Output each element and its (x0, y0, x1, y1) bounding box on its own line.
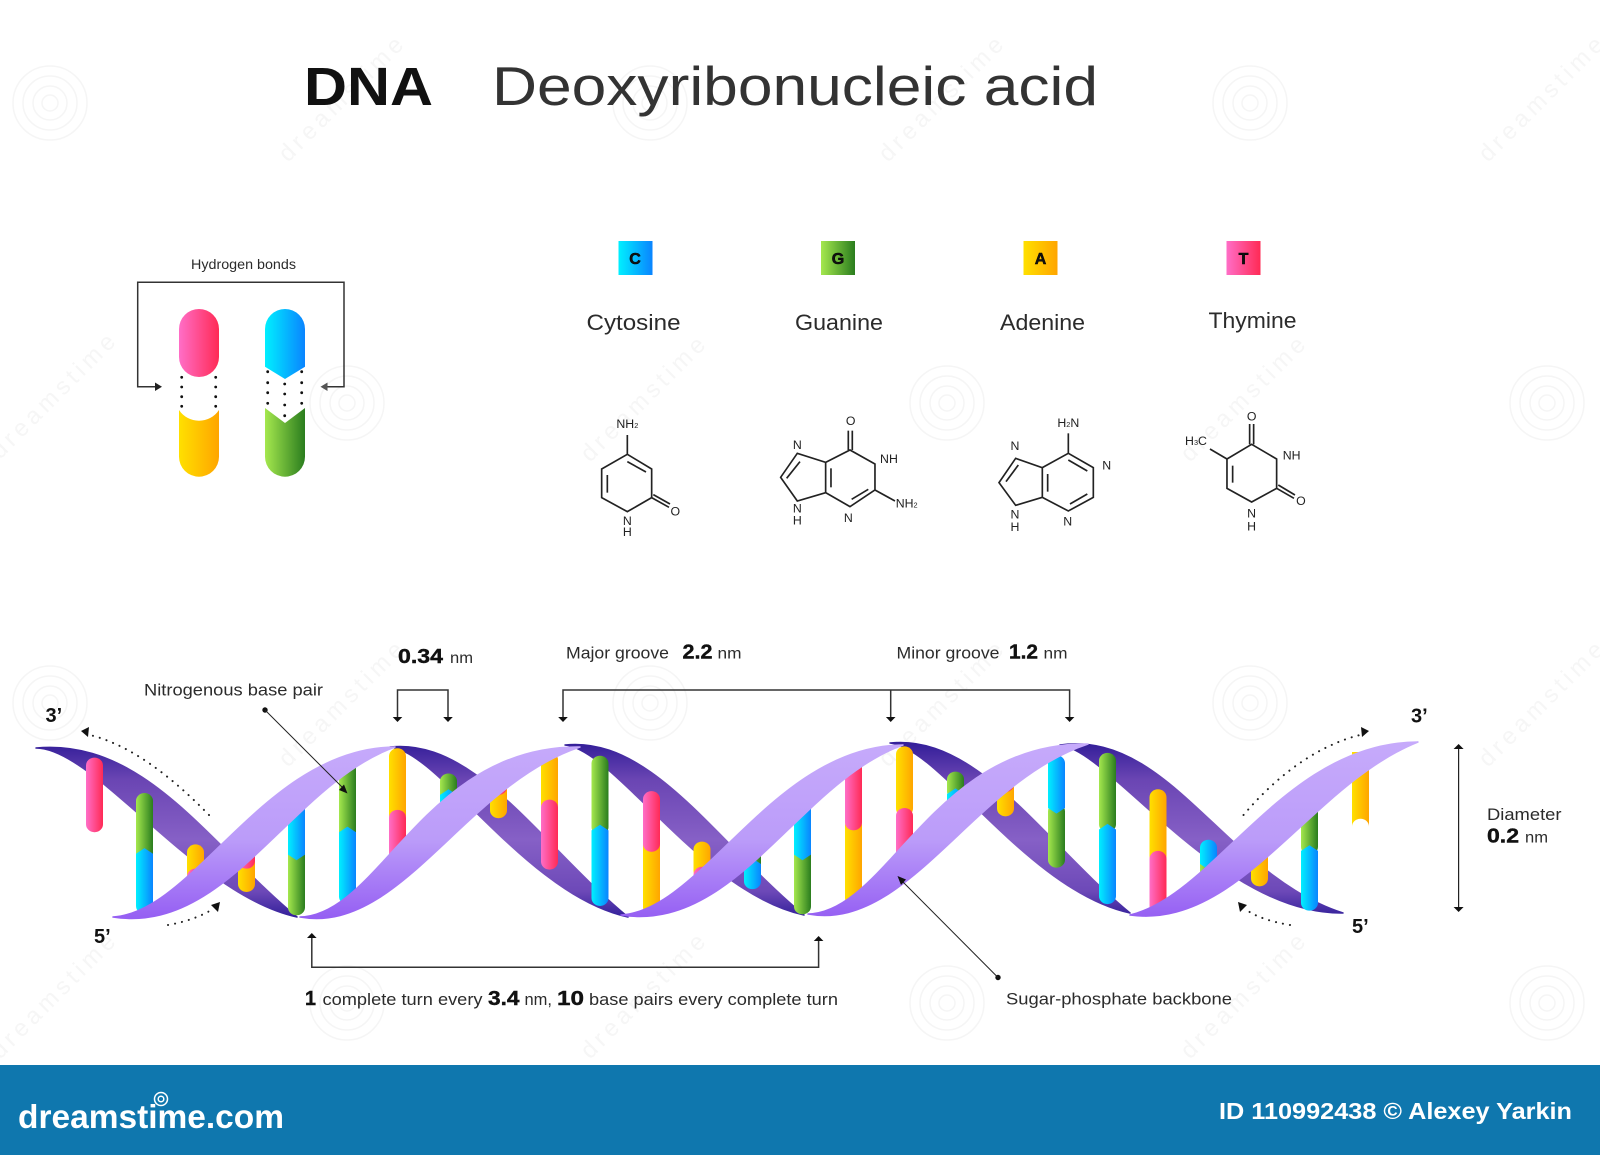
label: diameter: nm (1525, 830, 1548, 846)
name: Cytosine: Cytosine (586, 310, 680, 335)
label: complete turn: complete turn every (322, 990, 483, 1009)
footer bar (0, 1065, 1600, 1155)
badge A (1024, 241, 1058, 275)
label: diameter (1487, 805, 1562, 848)
label: sugar-phosphate backbone: Sugar-phosphate backbone (1006, 990, 1232, 1008)
label: 5 prime left: 5’ (94, 926, 111, 948)
watermark pattern: dreamstime (273, 31, 409, 167)
dotted arrow: lower right (1238, 902, 1290, 925)
label: minor groove: Minor groove (896, 644, 1000, 662)
watermark pattern: dreamstime (1175, 331, 1311, 467)
label: major groove: 2.2 (682, 642, 712, 664)
label: minor groove: 1.2 (1009, 642, 1038, 664)
capsule: cytosine (265, 309, 305, 379)
base pair bars (86, 746, 1369, 915)
structure: thymine: NH (1283, 448, 1301, 462)
capsule: guanine (265, 408, 305, 477)
structure: adenine: N (1063, 515, 1072, 529)
callout arrow: backbone (898, 876, 1001, 980)
structure: thymine: N (1247, 507, 1256, 521)
structure: guanine (781, 414, 918, 528)
label: complete turn: nm, (524, 990, 552, 1009)
label: major groove (566, 642, 742, 664)
structure: thymine: H (1247, 519, 1256, 533)
badge T (1226, 241, 1260, 275)
label: complete turn (305, 988, 838, 1010)
panel: adenine (999, 241, 1111, 534)
bracket with arrows (138, 282, 344, 391)
panel: hydrogen bonds (138, 257, 344, 477)
structure: cytosine: O (671, 504, 680, 518)
structure: thymine (1185, 409, 1306, 533)
structure: adenine: N (1011, 439, 1019, 453)
chart: DNA double helix (36, 742, 1418, 918)
structure: guanine: NH (880, 452, 898, 466)
label: 3 prime right: 3’ (1411, 706, 1428, 728)
label: complete turn: 10 (557, 988, 584, 1010)
label: 0.34 nm: 0.34 (398, 646, 444, 668)
title (304, 55, 1098, 117)
badge A: A (1035, 251, 1047, 268)
name: Thymine: Thymine (1208, 308, 1296, 333)
dotted arrow: lower left (168, 902, 220, 925)
structure: guanine: NH2 (896, 496, 918, 510)
structure: adenine: H (1011, 520, 1019, 534)
label: 3 prime left: 3’ (46, 705, 62, 727)
heading: hydrogen bonds: Hydrogen bonds (191, 257, 296, 272)
capsule: thymine (179, 309, 219, 377)
capsule: adenine (179, 410, 219, 477)
watermark pattern: dreamstime (873, 636, 1009, 772)
label: 0.34 nm (398, 646, 473, 668)
label: complete turn: 1 (305, 988, 316, 1010)
watermark pattern: dreamstime (1175, 928, 1311, 1064)
watermark pattern: dreamstime (575, 928, 711, 1064)
label: diameter: 0.2 (1487, 826, 1519, 848)
structure: thymine: H3C (1185, 434, 1207, 448)
title: Deoxyribonucleic acid (492, 55, 1098, 117)
name: Adenine: Adenine (1000, 310, 1085, 335)
label: nitrogenous base pair: Nitrogenous base pair (144, 681, 323, 700)
label: minor groove: nm (1044, 646, 1068, 662)
panel: thymine (1185, 241, 1306, 533)
footer logo text: dreamstime.com (18, 1098, 284, 1135)
label: major groove: Major groove (566, 644, 669, 662)
structure: adenine: N (1102, 459, 1111, 473)
structure: cytosine: NH2 (616, 417, 638, 431)
name: Guanine: Guanine (795, 310, 883, 335)
structure: adenine (999, 416, 1111, 534)
badge G: G (832, 251, 844, 268)
back strand ribbons (36, 742, 1343, 917)
footer image id: ID 110992438 © Alexey Yarkin (1219, 1098, 1572, 1124)
structure: guanine: N (793, 501, 802, 515)
label: 5 prime right: 5’ (1352, 916, 1369, 938)
structure: guanine: N (844, 511, 853, 525)
hydrogen bond dots (180, 370, 303, 417)
structure: thymine: O (1247, 409, 1256, 423)
structure: cytosine: N (623, 514, 632, 528)
watermark pattern: dreamstime (273, 636, 409, 772)
badge T: T (1239, 251, 1249, 268)
structure: adenine: N (1011, 508, 1019, 522)
badge C (618, 241, 652, 275)
label: diameter: Diameter (1487, 805, 1562, 824)
dimension arrow: diameter (1454, 744, 1464, 912)
dotted arrow: upper right (1244, 727, 1369, 815)
bracket: grooves (558, 690, 1074, 722)
structure: guanine: H (793, 514, 802, 528)
footer logo icon (154, 1092, 168, 1106)
structure: adenine: H2N (1057, 416, 1079, 430)
callout arrow: base pair (262, 707, 348, 794)
structure: cytosine: H (623, 525, 632, 539)
structure: cytosine (602, 417, 680, 539)
badge C: C (629, 251, 641, 268)
label: complete turn: base pairs every complete turn (589, 990, 838, 1009)
watermark pattern: dreamstime (873, 31, 1009, 167)
bracket: complete turn (307, 933, 823, 967)
panel: cytosine (586, 241, 680, 539)
label: complete turn: 3.4 (488, 988, 520, 1010)
structure: thymine: O (1296, 494, 1306, 508)
watermark pattern: dreamstime (575, 331, 711, 467)
badge G (821, 241, 855, 275)
label: 0.34 nm: nm (450, 650, 473, 667)
panel: guanine (781, 241, 918, 528)
structure: guanine: O (846, 414, 855, 428)
bracket: base pair spacing (393, 690, 453, 722)
label: major groove: nm (718, 646, 742, 662)
title: DNA (304, 57, 433, 117)
front strand ribbons (113, 742, 1418, 918)
structure: guanine: N (793, 438, 802, 452)
dotted arrow: upper left (81, 727, 209, 815)
label: minor groove (896, 642, 1068, 664)
